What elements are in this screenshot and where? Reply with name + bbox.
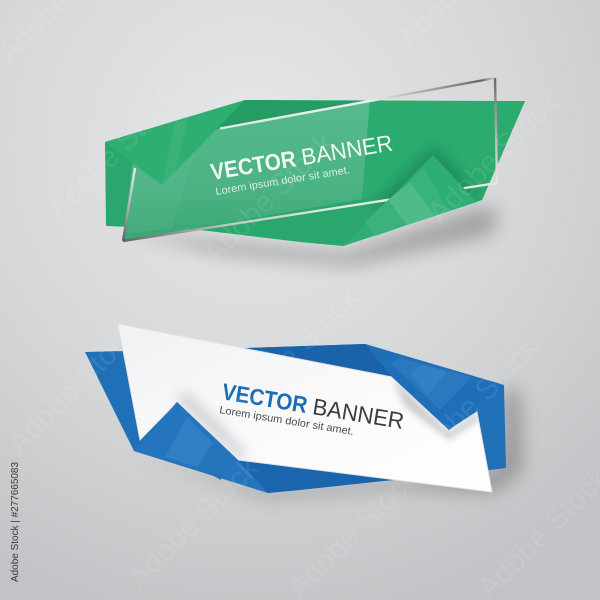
blue bottom strip xyxy=(238,460,393,493)
watermark: Adobe Stock xyxy=(402,331,546,475)
upper right flap xyxy=(365,344,504,430)
left flap xyxy=(105,100,245,185)
stock credit: Adobe Stock | #277665083 xyxy=(9,462,21,582)
watermark: Adobe Stock xyxy=(222,281,366,425)
blue subtitle: Lorem ipsum dolor sit amet. xyxy=(219,404,355,438)
green banner shadow xyxy=(125,205,500,266)
watermark: Adobe Stock xyxy=(122,451,266,595)
glass panel xyxy=(123,101,370,241)
white panel shadows xyxy=(177,377,478,458)
dark top strip xyxy=(200,100,370,135)
glass frame xyxy=(123,78,497,241)
green banner xyxy=(105,78,525,266)
blue banner xyxy=(85,324,522,498)
watermark: Adobe Stock xyxy=(422,86,566,230)
blue banner shadow xyxy=(135,385,522,498)
watermark: Adobe Stock xyxy=(42,81,186,225)
lower left fold xyxy=(134,402,268,493)
blue darker top xyxy=(247,344,392,377)
white panel xyxy=(118,324,492,492)
blue heading: VECTORBANNER xyxy=(220,378,406,434)
watermark: Adobe Stock xyxy=(2,316,146,460)
green banner body xyxy=(105,100,525,246)
green heading: VECTORBANNER xyxy=(209,130,394,185)
watermark: Adobe Stock xyxy=(197,126,341,270)
green subtitle: Lorem ipsum dolor sit amet. xyxy=(215,164,351,198)
right banner tone xyxy=(362,101,525,200)
fold shadow xyxy=(378,146,478,207)
blue back shape xyxy=(85,344,506,493)
lower right fold xyxy=(343,155,477,246)
left glass highlight xyxy=(127,150,195,234)
